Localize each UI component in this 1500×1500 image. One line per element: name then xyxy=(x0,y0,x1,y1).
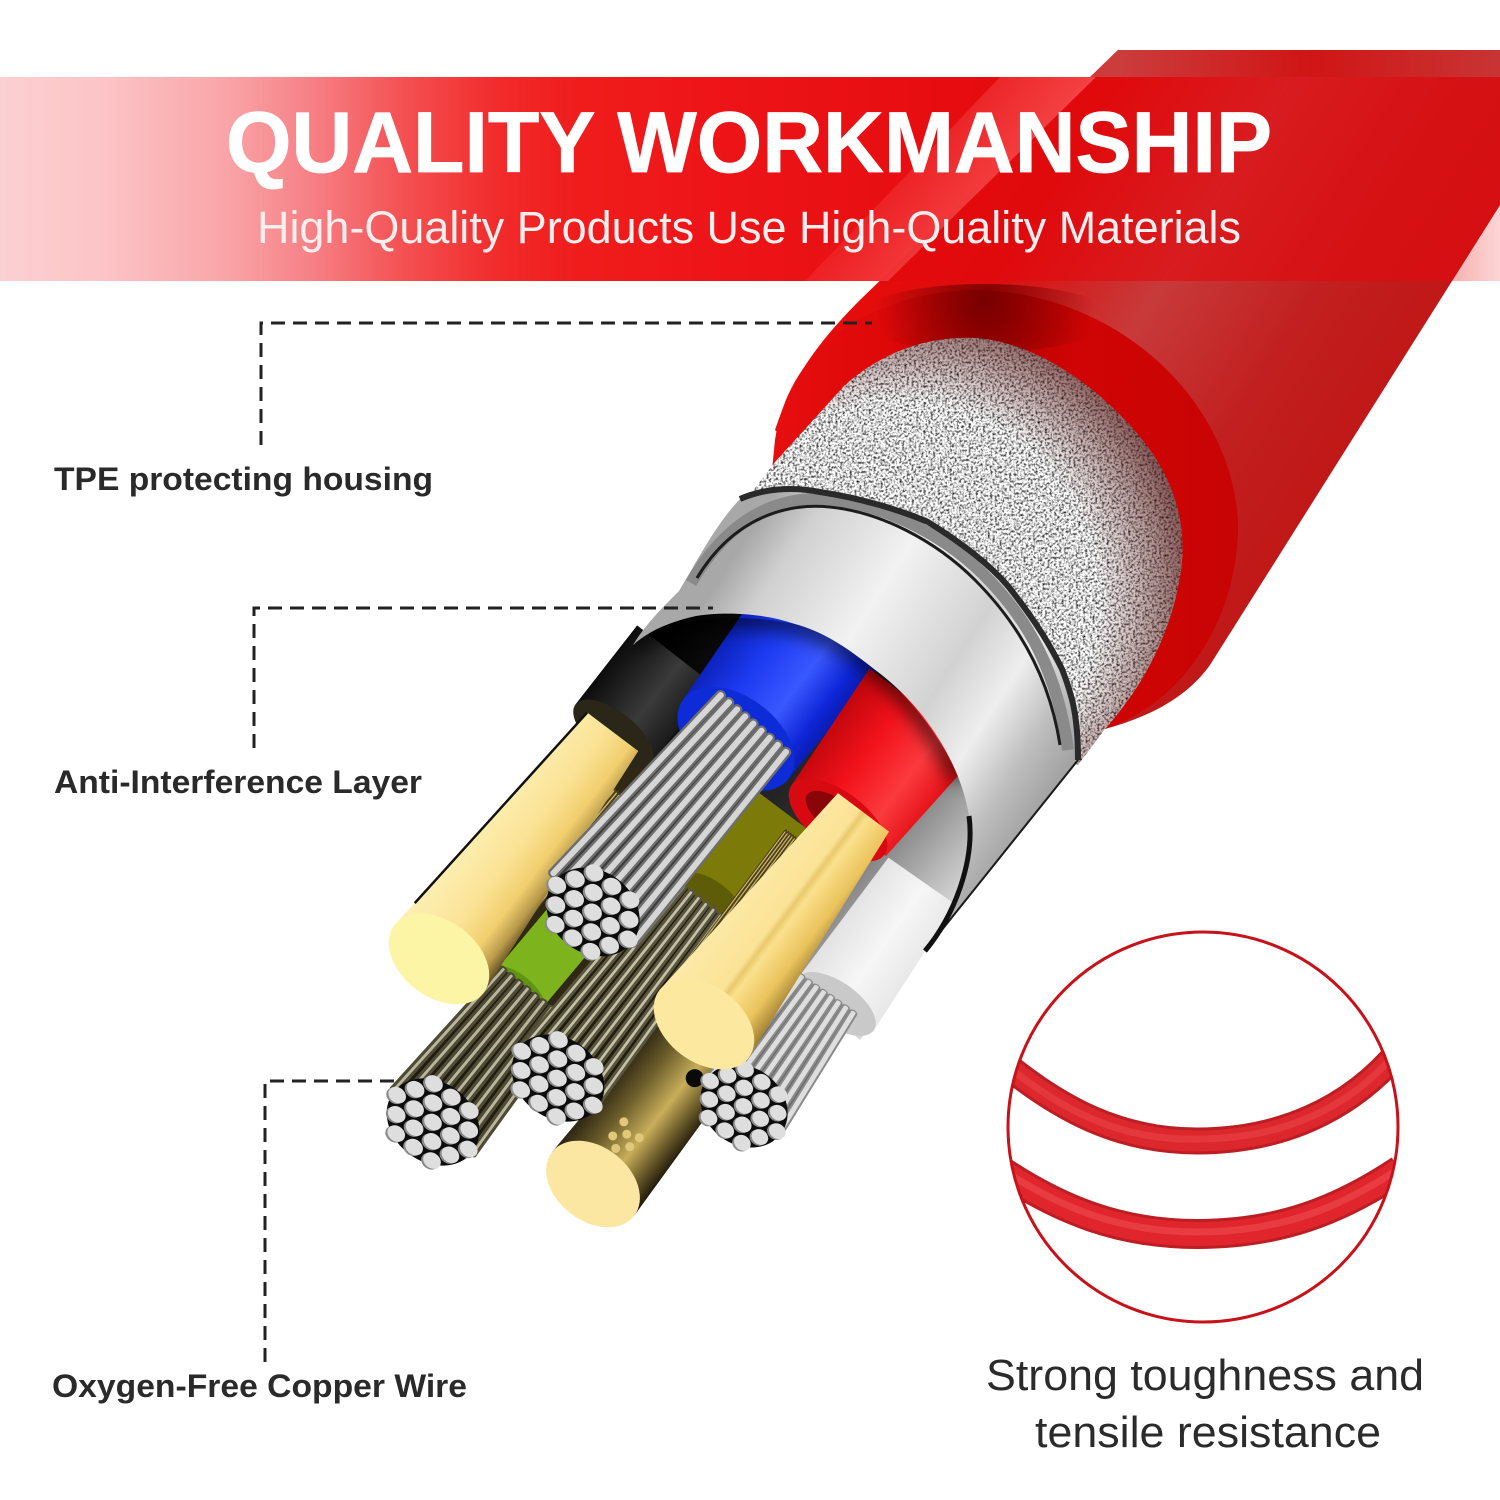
black wire sheath xyxy=(562,625,713,781)
silver wire strands xyxy=(523,687,795,978)
label: Oxygen-Free Copper Wire: Oxygen-Free Copper Wire xyxy=(52,1368,467,1404)
cable core interior xyxy=(560,602,970,1040)
green wire sheath xyxy=(489,904,598,1016)
jacket cut ring xyxy=(772,284,1238,729)
green wire strands xyxy=(364,962,577,1187)
core shadow xyxy=(633,618,960,780)
pale gold conductor left xyxy=(371,697,656,1023)
leader line: copper wire xyxy=(265,1081,400,1362)
title: QUALITY WORKMANSHIP xyxy=(226,95,1272,191)
silver metal band xyxy=(633,489,1078,951)
leader line: anti-interference layer xyxy=(254,608,713,748)
dark gold conductor xyxy=(529,1014,742,1245)
caption: strong toughness xyxy=(986,1351,1424,1457)
leader line: TPE housing xyxy=(261,323,872,445)
olive wire strands xyxy=(489,869,736,1143)
brown strands by left conductor xyxy=(469,781,626,959)
dark filler between strands xyxy=(487,760,800,1070)
red wire sheath xyxy=(768,668,980,886)
red cable jacket xyxy=(775,50,1500,729)
subtitle: High-Quality Products Use High-Quality Materials xyxy=(257,202,1241,253)
blue wire sheath xyxy=(653,584,878,816)
caption: strong toughness: tensile resistance xyxy=(1035,1408,1381,1457)
pale gold conductor right xyxy=(636,779,908,1088)
white wire sheath xyxy=(786,855,960,1048)
banner band xyxy=(0,77,1500,281)
foil shield layer xyxy=(700,338,1182,765)
label: Anti-Interference Layer: Anti-Interference Layer xyxy=(54,764,422,800)
olive wire sheath xyxy=(678,788,807,928)
brown strands by right conductor xyxy=(677,831,805,993)
label: TPE protecting housing: TPE protecting housing xyxy=(54,461,433,497)
inset circle: flexible cable xyxy=(1000,932,1400,1322)
white wire strands xyxy=(679,966,862,1168)
caption: strong toughness: Strong toughness and xyxy=(986,1351,1424,1400)
